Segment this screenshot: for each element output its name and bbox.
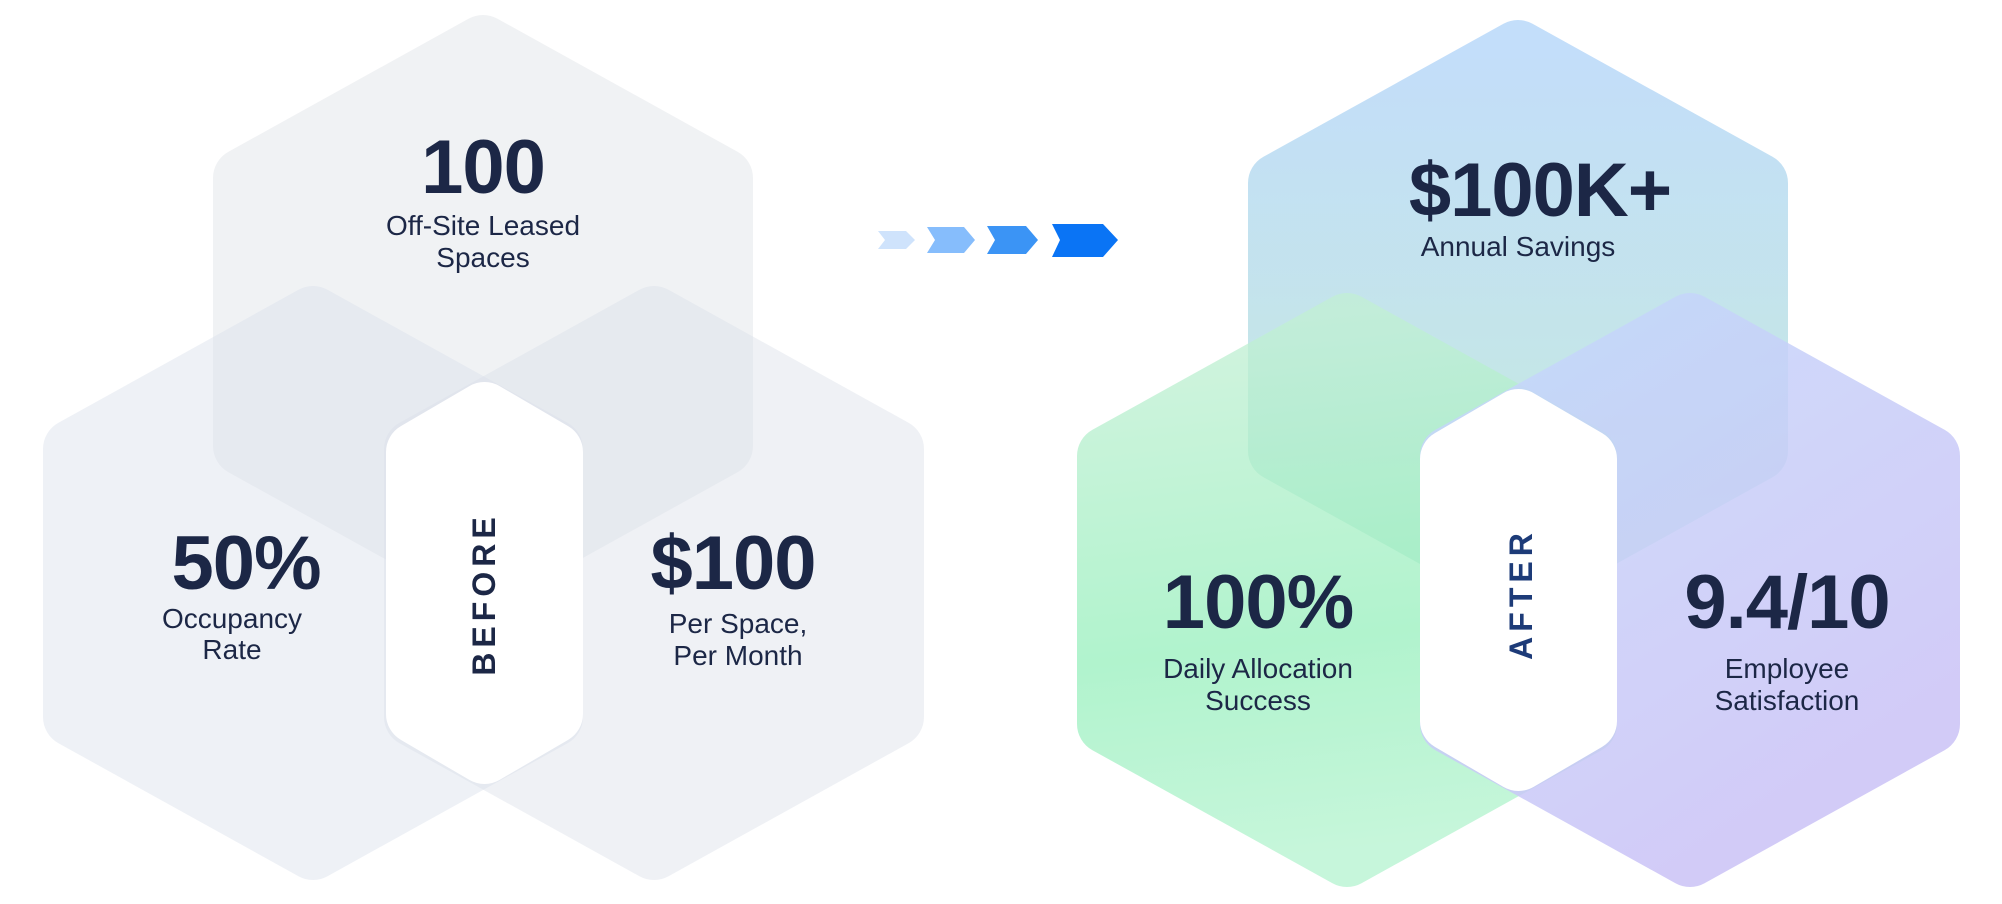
stat: 9.4/10 satisfaction: 9.4/10: [1684, 560, 1890, 645]
hex: before right: [414, 316, 894, 850]
stat: 100% allocation: Success: [1205, 685, 1311, 716]
hex: after right: [1450, 323, 1930, 857]
stat: $100 per space: [650, 521, 816, 671]
stat: 9.4/10 satisfaction: Employee: [1725, 653, 1849, 684]
hex: after left: [1107, 323, 1587, 857]
stat: 50% occupancy: Occupancy: [162, 603, 302, 634]
stat: 50% occupancy: Rate: [202, 634, 262, 665]
stat: 50% occupancy: [162, 521, 321, 665]
panel: after: [1107, 50, 1930, 857]
stat: 100 spaces: Spaces: [436, 242, 530, 273]
hex: before top: [243, 45, 723, 579]
stat: $100 per space: Per Space,: [669, 608, 807, 639]
arrows: progression chevrons: [878, 224, 1118, 257]
stat: 100% allocation: [1163, 560, 1353, 716]
stat: 100 spaces: 100: [421, 125, 545, 210]
white center lens before: [416, 412, 553, 754]
stat: $100 per space: Per Month: [673, 640, 803, 671]
stat: 50% occupancy: 50%: [171, 521, 321, 606]
stat: $100 per space: $100: [650, 521, 816, 606]
panel: before: [73, 45, 894, 850]
label: AFTER: AFTER: [1503, 528, 1539, 660]
white center lens after: [1450, 419, 1587, 761]
stat: 9.4/10 satisfaction: [1684, 560, 1890, 716]
hex: after top: [1278, 50, 1758, 584]
stat: 100% allocation: 100%: [1163, 560, 1353, 645]
stat: $100K+ savings: $100K+: [1409, 148, 1671, 233]
stat: 100 spaces: Off-Site Leased: [386, 210, 580, 241]
stat: 9.4/10 satisfaction: Satisfaction: [1715, 685, 1859, 716]
stat: 100 spaces: [386, 125, 580, 273]
label: BEFORE: BEFORE: [466, 512, 502, 676]
hex: before left: [73, 316, 553, 850]
stat: 100% allocation: Daily Allocation: [1163, 653, 1353, 684]
stat: $100K+ savings: Annual Savings: [1421, 231, 1615, 262]
